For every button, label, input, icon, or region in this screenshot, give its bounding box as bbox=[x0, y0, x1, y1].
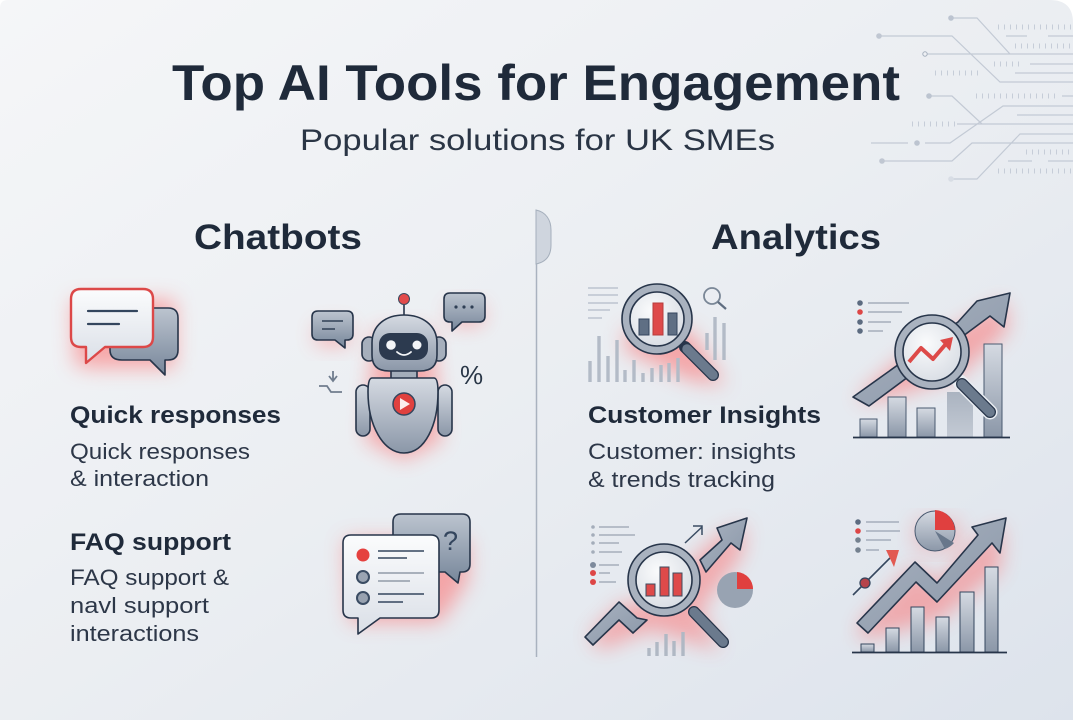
panel divider bbox=[536, 210, 551, 657]
icon: chat bubbles bbox=[71, 289, 178, 375]
icon: magnifier with bar chart bbox=[588, 284, 726, 385]
text: FAQ support bbox=[70, 529, 231, 646]
icon: magnifier with growth arrow and pie bbox=[585, 518, 753, 656]
text: customer insights: Customer Insights bbox=[588, 402, 821, 429]
icon: robot bbox=[312, 293, 485, 460]
heading: chatbots: Chatbots bbox=[194, 218, 362, 257]
text: customer insights: & trends tracking bbox=[588, 467, 775, 492]
panel: analytics bbox=[585, 218, 1010, 656]
icon: magnifier with trend arrow bbox=[853, 293, 1010, 438]
speech bubble left bbox=[312, 311, 353, 348]
icon: FAQ bubbles bbox=[343, 514, 470, 634]
speech bubble right bbox=[444, 293, 485, 331]
heading: analytics: Analytics bbox=[711, 218, 881, 257]
text: quick responses: Quick responses bbox=[70, 439, 250, 464]
text: FAQ support: FAQ support & bbox=[70, 565, 229, 590]
text: quick responses: & interaction bbox=[70, 466, 209, 491]
text: FAQ support: interactions bbox=[70, 621, 199, 646]
text: quick responses bbox=[70, 402, 281, 491]
subtitle: Popular solutions for UK SMEs bbox=[300, 124, 775, 157]
text: customer insights bbox=[588, 402, 821, 492]
title: Top AI Tools for Engagement bbox=[172, 55, 900, 111]
percent symbol: % bbox=[460, 360, 483, 390]
icon: FAQ bubbles: ? bbox=[443, 526, 458, 556]
icon: rising bar chart with arrow bbox=[852, 510, 1007, 652]
panel: chatbots bbox=[70, 218, 485, 646]
small arrow bbox=[319, 371, 342, 392]
text: quick responses: Quick responses bbox=[70, 402, 281, 429]
text: FAQ support: navl support bbox=[70, 593, 209, 618]
text: FAQ support: FAQ support bbox=[70, 529, 231, 556]
text: customer insights: Customer: insights bbox=[588, 439, 796, 464]
circuit pattern decoration bbox=[871, 15, 1073, 182]
